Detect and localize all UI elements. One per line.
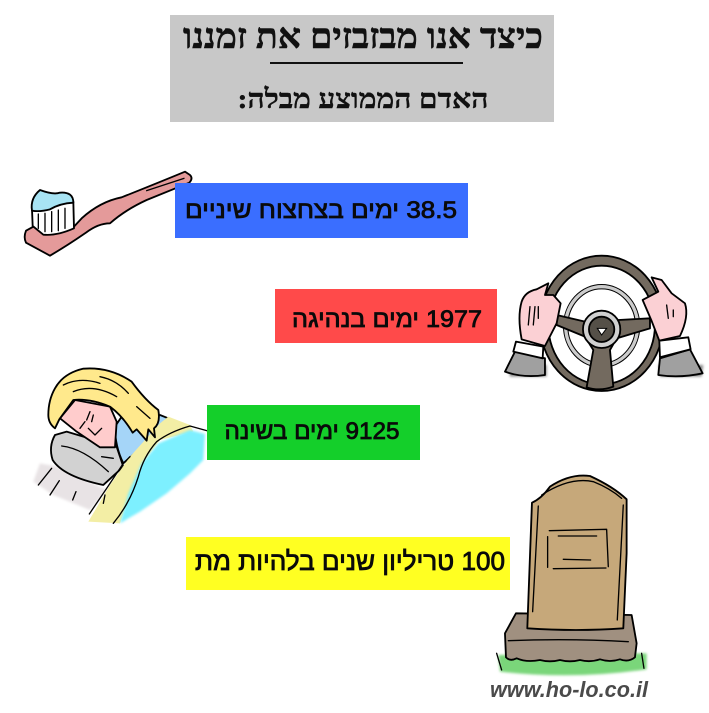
bar: tooth brushing xyxy=(175,183,468,238)
icon: tombstone xyxy=(497,476,647,675)
bar: sleeping: 9125 ימים בשינה xyxy=(224,418,400,445)
subheading: האדם הממוצע מבלה: xyxy=(238,84,488,114)
bar: being dead: 100 טריליון שנים בלהיות מת xyxy=(195,546,505,576)
bar: sleeping xyxy=(207,405,420,460)
icon: sleeping person xyxy=(33,368,207,523)
bar: tooth brushing: 38.5 ימים בצחצוח שיניים xyxy=(185,197,457,224)
bar: driving xyxy=(275,289,497,343)
credit: www.ho-lo.co.il xyxy=(490,677,649,702)
icon: toothbrush xyxy=(25,172,191,256)
bar: driving: 1977 ימים בנהיגה xyxy=(292,306,482,333)
bar: being dead xyxy=(186,537,510,590)
icon: steering wheel with hands xyxy=(505,256,703,391)
heading: כיצד אנו מבזבזים את זמננו xyxy=(183,17,543,56)
title panel xyxy=(170,15,554,122)
